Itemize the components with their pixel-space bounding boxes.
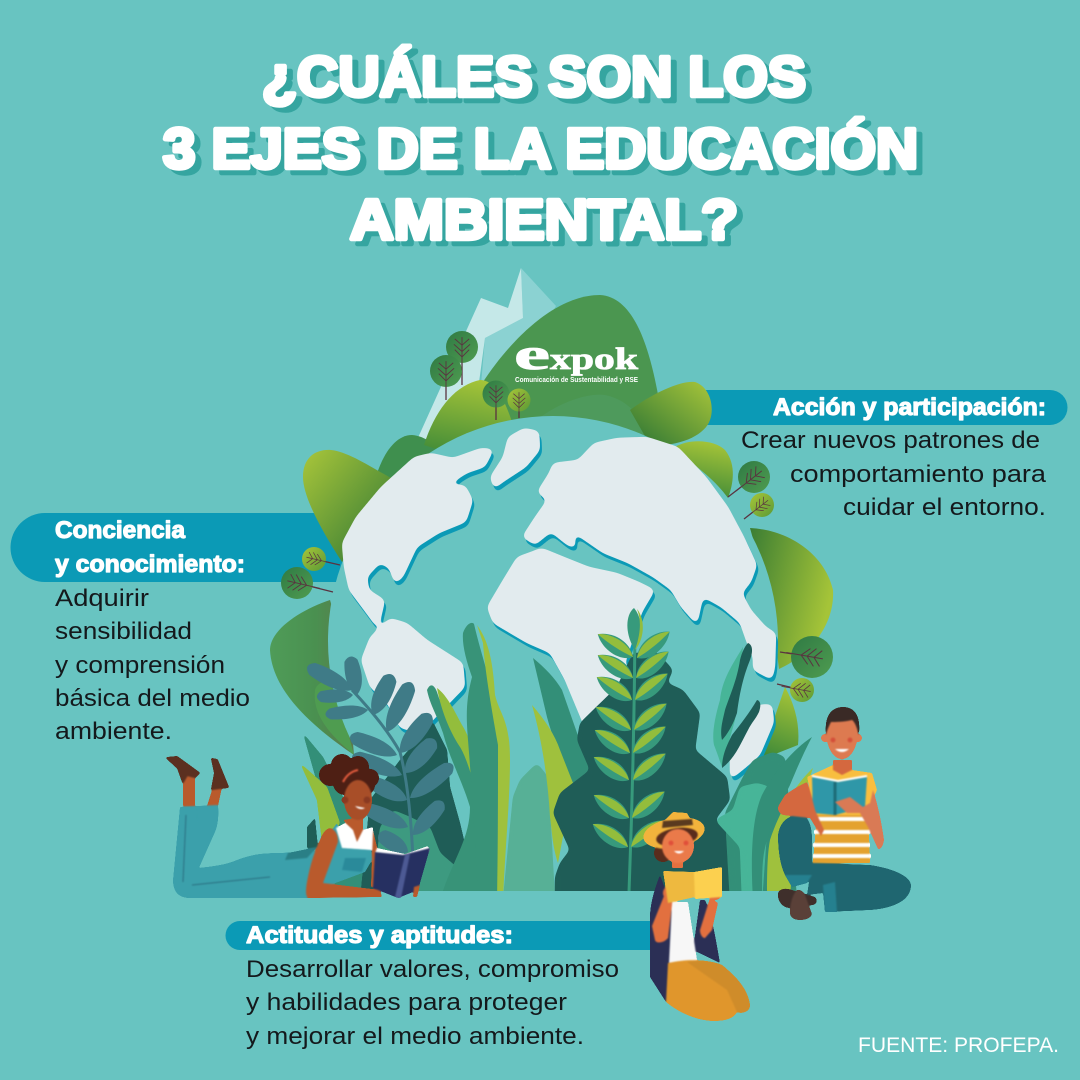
plants foreground bbox=[300, 608, 813, 900]
text: actitudes y aptitudes bbox=[246, 922, 619, 1050]
text: conciencia y conocimiento: Adquirir bbox=[55, 585, 149, 612]
plant: green fern bbox=[592, 608, 670, 891]
trees bbox=[281, 331, 833, 702]
continents bbox=[342, 428, 778, 784]
text: actitudes y aptitudes: y mejorar el medio ambiente. bbox=[246, 1023, 584, 1050]
title: AMBIENTAL? bbox=[350, 188, 738, 252]
title: 3 EJES DE LA EDUCACIÓN bbox=[163, 117, 918, 181]
text: actitudes y aptitudes: Desarrollar valores, compromiso bbox=[246, 956, 619, 983]
text: actitudes y aptitudes: Actitudes y aptitudes: bbox=[246, 922, 513, 949]
panel bar: accion bbox=[690, 390, 1068, 425]
plant: blue-grey fern bbox=[304, 655, 458, 860]
panel bar: conciencia bbox=[11, 513, 345, 582]
panel bar: actitudes bbox=[225, 921, 660, 950]
figure: man with teal book bbox=[778, 707, 911, 920]
plants: back bushes and leaves bbox=[300, 623, 813, 900]
logo: expok: e bbox=[514, 330, 550, 379]
text: conciencia y conocimiento: ambiente. bbox=[55, 718, 172, 745]
text: conciencia y conocimiento: Conciencia bbox=[55, 517, 186, 544]
text: conciencia y conocimiento bbox=[55, 517, 250, 745]
text: accion y participacion bbox=[741, 394, 1046, 521]
mountain bbox=[417, 268, 556, 445]
text: conciencia y conocimiento: sensibilidad bbox=[55, 618, 192, 645]
title: ¿CUÁLES SON LOS bbox=[262, 45, 806, 109]
title bbox=[163, 45, 918, 252]
source note: FUENTE: PROFEPA. bbox=[858, 1034, 1059, 1057]
text: actitudes y aptitudes: y habilidades para proteger bbox=[246, 989, 567, 1016]
hills and leaves behind the globe bbox=[270, 295, 833, 760]
figure: woman lying with blue book bbox=[167, 754, 430, 898]
text: conciencia y conocimiento: y conocimiento: bbox=[55, 551, 245, 578]
text: accion y participacion: Acción y participación: bbox=[773, 394, 1046, 421]
text: accion y participacion: Crear nuevos patrones de bbox=[741, 427, 1040, 454]
text: accion y participacion: comportamiento para bbox=[790, 461, 1046, 488]
logo: expok: Comunicación de Sustentabilidad y RSE bbox=[515, 375, 638, 384]
globe bbox=[328, 416, 778, 866]
logo: expok: xpok bbox=[550, 341, 639, 376]
text: conciencia y conocimiento: básica del medio bbox=[55, 685, 250, 712]
text: conciencia y conocimiento: y comprensión bbox=[55, 652, 225, 679]
logo: expok bbox=[514, 330, 639, 384]
text: accion y participacion: cuidar el entorno. bbox=[843, 494, 1046, 521]
figure: woman with hat and yellow book bbox=[641, 812, 750, 1021]
